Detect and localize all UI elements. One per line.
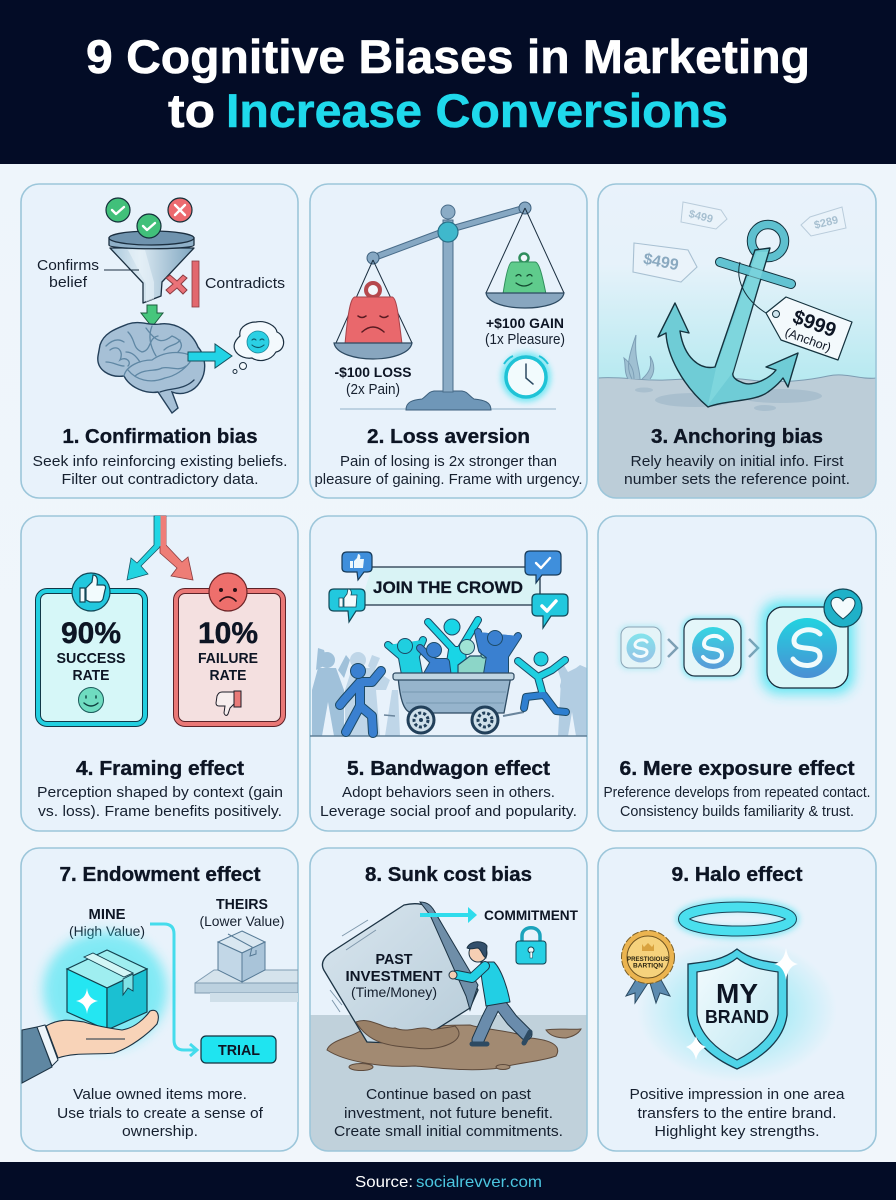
icon: boulder: INVESTMENT (346, 968, 442, 985)
tag: $999 anchor: (Anchor) (783, 325, 833, 355)
icon: prestige badge (622, 930, 674, 1003)
icon: green gain weight (486, 208, 564, 308)
tag: $999 anchor: $999 (790, 306, 839, 342)
figure: person walking to wagon (340, 664, 381, 733)
card: 10% failure: 10% (198, 617, 258, 650)
description: Rely heavily on initial info. First (630, 454, 844, 470)
description: Consistency builds familiarity & trust. (620, 804, 854, 820)
description: vs. loss). Frame benefits positively. (38, 804, 282, 820)
label: loss (334, 364, 412, 398)
panel 8: sunk cost bias (310, 848, 587, 1151)
description: Seek info reinforcing existing beliefs. (32, 454, 288, 470)
card: 10% failure: FAILURE (198, 650, 258, 667)
heading: 4. Framing effect (76, 758, 244, 780)
label: loss: (2x Pain) (346, 382, 400, 398)
icon: my brand shield: MY (716, 978, 758, 1009)
icon: glowing clock (501, 352, 551, 402)
title line 1: 9 Cognitive Biases in Marketing (86, 30, 810, 83)
card: 90% success (38, 573, 145, 724)
description: investment, not future benefit. (344, 1106, 553, 1122)
panel 3: anchoring bias (598, 184, 876, 498)
label: gain: (1x Pleasure) (485, 332, 565, 348)
icon: my brand shield: BRAND (705, 1007, 769, 1027)
tag: $999 anchor (739, 262, 852, 360)
icon: shelf with box (195, 931, 298, 1002)
panel 5: bandwagon effect (310, 516, 587, 831)
heading: 2. Loss aversion (367, 426, 530, 448)
icon: padlock (516, 928, 546, 964)
description: ownership. (122, 1124, 198, 1140)
description: Leverage social proof and popularity. (320, 804, 577, 820)
label: mine: (High Value) (69, 923, 145, 939)
heading: 9. Halo effect (672, 864, 803, 886)
icon: sparkles (686, 948, 798, 1060)
icon: anchor (658, 224, 798, 407)
icon: small faded logo (619, 625, 663, 670)
price tags: $499 (687, 208, 714, 226)
icon: medium logo (682, 617, 743, 678)
icon: cyan arrow (188, 344, 232, 368)
description: number sets the reference point. (624, 472, 850, 488)
label: commitment: COMMITMENT (484, 907, 578, 923)
description (624, 454, 850, 488)
description: Use trials to create a sense of (57, 1106, 264, 1122)
icon: balance scale (340, 202, 556, 410)
description: Adopt behaviors seen in others. (342, 785, 555, 801)
panel 9: halo effect (598, 848, 876, 1151)
description: Filter out contradictory data. (62, 472, 258, 488)
label: mine (69, 907, 145, 939)
crowd silhouettes (312, 648, 587, 736)
heading: 5. Bandwagon effect (347, 758, 550, 780)
panel 7: endowment effect (21, 848, 298, 1151)
icon: like and check bubbles (329, 551, 568, 628)
description: Preference develops from repeated contact. (604, 785, 870, 801)
icon: chevron (749, 639, 758, 657)
footer: source: socialrevver.com (416, 1174, 542, 1191)
arrow: to trial (150, 924, 197, 1056)
icon: prestige badge: BARTIQN (633, 964, 663, 970)
icon: boulder: (Time/Money) (351, 984, 437, 1000)
heading: 7. Endowment effect (60, 864, 261, 886)
people on the wagon (388, 619, 518, 680)
heading: 6. Mere exposure effect (620, 758, 855, 780)
description: Continue based on past (366, 1087, 531, 1103)
figure: person pushing (449, 942, 530, 1044)
icon: my brand shield (688, 949, 787, 1069)
label: gain: +$100 GAIN (486, 315, 564, 331)
price tags (633, 202, 846, 282)
panel 4: framing effect (21, 516, 298, 831)
description: Value owned items more. (73, 1087, 247, 1103)
icon: rays glow (637, 938, 837, 1082)
heading: 1. Confirmation bias (62, 426, 258, 448)
footer: source: Source: (355, 1174, 413, 1191)
description (604, 785, 870, 820)
description (314, 454, 582, 488)
description (334, 1087, 563, 1140)
card: 90% success: RATE (72, 667, 110, 684)
icon: rejected contradiction (166, 261, 199, 307)
description: Pain of losing is 2x stronger than (340, 454, 557, 470)
icon: boulder: PAST (376, 951, 412, 968)
price tags: $289 (813, 214, 840, 232)
icon: glowing box on hand (22, 932, 167, 1083)
description (630, 1087, 845, 1140)
ground line (310, 735, 587, 737)
panel 6: mere exposure effect (598, 516, 876, 831)
icon: brain (98, 323, 205, 413)
description: pleasure of gaining. Frame with urgency. (314, 472, 582, 488)
button: trial: TRIAL (218, 1043, 260, 1059)
description: transfers to the entire brand. (638, 1106, 836, 1122)
title line 2: to (168, 84, 215, 137)
icon: seaweed (624, 335, 654, 379)
label: gain (485, 315, 565, 348)
label: theirs (200, 897, 284, 929)
icon: splitting arrows (127, 516, 193, 580)
icon: small puddles (349, 1029, 581, 1070)
label: loss: -$100 LOSS (334, 364, 412, 380)
description: Perception shaped by context (gain (37, 785, 283, 801)
label: theirs: (Lower Value) (200, 913, 284, 929)
heading: 3. Anchoring bias (651, 426, 823, 448)
icon: large logo with heart (761, 589, 862, 694)
label: confirms belief: Confirms (37, 258, 99, 274)
card: 10% failure (176, 573, 283, 724)
button: trial (201, 1036, 276, 1063)
icon: mud (327, 1023, 558, 1070)
description: Highlight key strengths. (654, 1124, 820, 1140)
price tags: $499 (642, 251, 680, 274)
description (57, 1087, 264, 1140)
icon: red loss weight (334, 260, 412, 359)
icon: boulder (322, 902, 478, 1049)
label: mine: MINE (88, 907, 126, 923)
figure: person jumping (518, 652, 566, 712)
card: 90% success: 90% (61, 617, 121, 650)
title line 2: Increase Conversions (226, 84, 728, 137)
icon: thought bubble with smile (233, 322, 284, 374)
icon: chevron (668, 639, 677, 657)
description (320, 785, 577, 820)
label: confirms belief (37, 258, 99, 291)
description (37, 785, 283, 820)
footer: source (0, 1162, 896, 1200)
card: 10% failure: RATE (210, 667, 246, 684)
header banner (0, 0, 896, 164)
banner: join the crowd: JOIN THE CROWD (373, 578, 523, 597)
icon: prestige badge: PRESTIGIOUS (627, 957, 669, 963)
card: 90% success: SUCCESS (56, 650, 126, 667)
icon: green arrow (141, 305, 163, 327)
description: Positive impression in one area (630, 1087, 845, 1103)
label: confirms belief: belief (49, 275, 88, 291)
icon: halo ring (682, 905, 794, 933)
icon: funnel with filtered items (104, 198, 194, 303)
panel 1: confirmation bias (21, 184, 298, 498)
description (32, 454, 288, 488)
banner: join the crowd (360, 567, 540, 605)
heading: 8. Sunk cost bias (365, 864, 532, 886)
label: contradicts: Contradicts (205, 276, 285, 292)
panel 2: loss aversion (310, 184, 587, 498)
label: theirs: THEIRS (216, 897, 268, 913)
description: Create small initial commitments. (334, 1124, 563, 1140)
arrow: to commitment (420, 907, 477, 923)
icon: wagon (384, 673, 524, 733)
